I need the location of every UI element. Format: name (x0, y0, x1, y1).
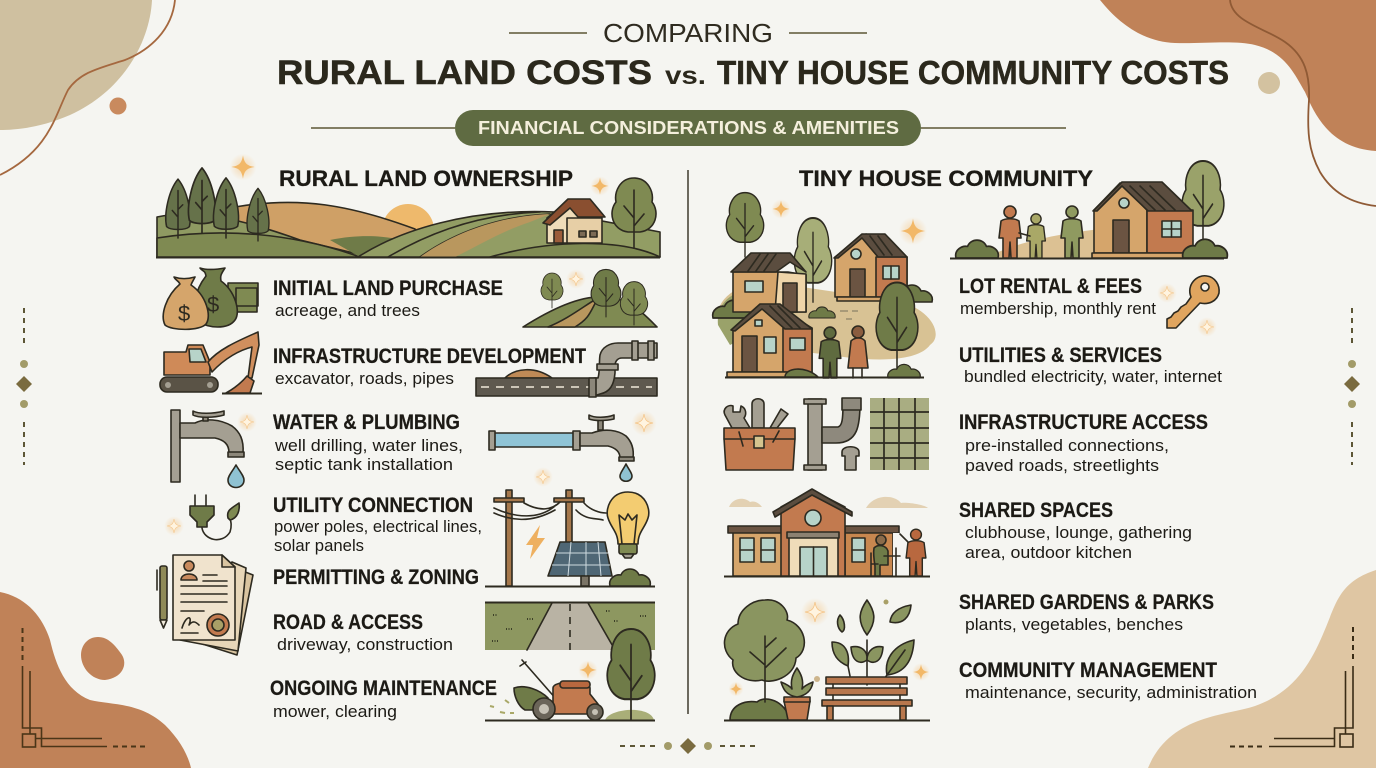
icon: permit documents (157, 555, 253, 655)
corner decoration: top left (0, 0, 175, 175)
bottom ornament (620, 738, 756, 754)
illustration: lawn mower and tree (485, 629, 655, 720)
heading: WATER & PLUMBING (273, 411, 460, 434)
item: water and plumbing: septic tank installation (275, 455, 453, 474)
corner decoration: top right (1100, 0, 1376, 206)
icon: money bags (163, 268, 258, 329)
description: mower, clearing (273, 702, 397, 721)
heading: SHARED GARDENS & PARKS (959, 591, 1214, 614)
description: excavator, roads, pipes (275, 369, 454, 388)
description: plants, vegetables, benches (965, 615, 1183, 634)
center divider (687, 170, 689, 714)
heading: LOT RENTAL & FEES (959, 275, 1142, 298)
item: lot rental and fees (959, 275, 1219, 337)
item: shared spaces: area, outdoor kitchen (965, 543, 1132, 562)
main title: vs. (665, 62, 706, 90)
icon: money bags: $ (178, 301, 190, 326)
item: infrastructure development (160, 332, 657, 397)
item: infrastructure access: paved roads, streetlights (965, 456, 1159, 475)
main title: TINY HOUSE COMMUNITY COSTS (717, 54, 1229, 91)
illustration: road through field (485, 602, 655, 650)
icon: key (1157, 276, 1219, 337)
heading: SHARED SPACES (959, 499, 1113, 522)
description: well drilling, water lines, (274, 436, 463, 455)
icon: excavator (160, 332, 262, 394)
item: ongoing maintenance (270, 629, 655, 721)
item: road and access (273, 602, 655, 654)
item: utility connection: solar panels (274, 536, 364, 555)
description: maintenance, security, administration (965, 683, 1257, 702)
heading: rural land ownership: RURAL LAND OWNERSHIP (279, 166, 573, 191)
description: membership, monthly rent (960, 299, 1156, 318)
icon: pipes (804, 398, 861, 470)
item: utility connection (164, 490, 655, 586)
item: permitting and zoning (157, 555, 479, 655)
illustration: tiny house neighborhood (713, 193, 936, 378)
description: power poles, electrical lines, (274, 517, 482, 536)
item: utilities and services (959, 344, 1222, 386)
subtitle pill (311, 110, 1066, 146)
eyebrow: comparing: COMPARING (603, 18, 773, 48)
main title: RURAL LAND COSTS (277, 54, 652, 92)
subtitle pill: FINANCIAL CONSIDERATIONS & AMENITIES (478, 118, 899, 138)
illustration: garden with tree and bench (724, 598, 930, 720)
panel: rural land ownership (156, 154, 660, 721)
illustration: poles, solar panel and bulb (485, 490, 655, 586)
heading: COMMUNITY MANAGEMENT (959, 659, 1217, 682)
illustration: road and pipes (476, 341, 657, 397)
description: driveway, construction (277, 635, 453, 654)
heading: INFRASTRUCTURE ACCESS (959, 411, 1208, 434)
item: infrastructure access (724, 398, 1208, 475)
description: bundled electricity, water, internet (964, 367, 1222, 386)
icon: street grid (870, 398, 929, 470)
icon: money bags: $ (207, 292, 219, 317)
item: shared spaces (724, 489, 1192, 576)
heading: INFRASTRUCTURE DEVELOPMENT (273, 345, 586, 368)
item: community management (959, 659, 1257, 702)
icon: plug with leaf (164, 495, 239, 540)
description: pre-installed connections, (965, 436, 1169, 455)
header (277, 18, 1229, 146)
icon: toolbox (724, 399, 795, 470)
panel: tiny house community (713, 161, 1257, 720)
heading: PERMITTING & ZONING (273, 566, 479, 589)
item: shared gardens and parks (724, 591, 1214, 720)
item: initial land purchase (163, 268, 657, 329)
corner decoration: bottom right (1148, 570, 1376, 768)
heading: ROAD & ACCESS (273, 611, 423, 634)
illustration: blue pipe faucet (489, 410, 657, 487)
heading: tiny house community: TINY HOUSE COMMUNITY (799, 166, 1093, 191)
description: clubhouse, lounge, gathering (965, 523, 1192, 542)
main title (277, 54, 1229, 92)
corner decoration: bottom left (0, 592, 191, 768)
heading: INITIAL LAND PURCHASE (273, 277, 503, 300)
item: water and plumbing (171, 410, 657, 488)
side ornament left (16, 308, 32, 465)
illustration: family at tiny house (950, 161, 1227, 258)
heading: UTILITIES & SERVICES (959, 344, 1162, 367)
side ornament right (1344, 308, 1360, 465)
heading: ONGOING MAINTENANCE (270, 677, 497, 700)
illustration: rolling hills banner (156, 154, 660, 258)
illustration: clubhouse (724, 489, 930, 576)
heading: UTILITY CONNECTION (273, 494, 473, 517)
description: acreage, and trees (275, 301, 420, 320)
icon: wall faucet (171, 410, 257, 488)
illustration: hill with trees (523, 269, 657, 327)
